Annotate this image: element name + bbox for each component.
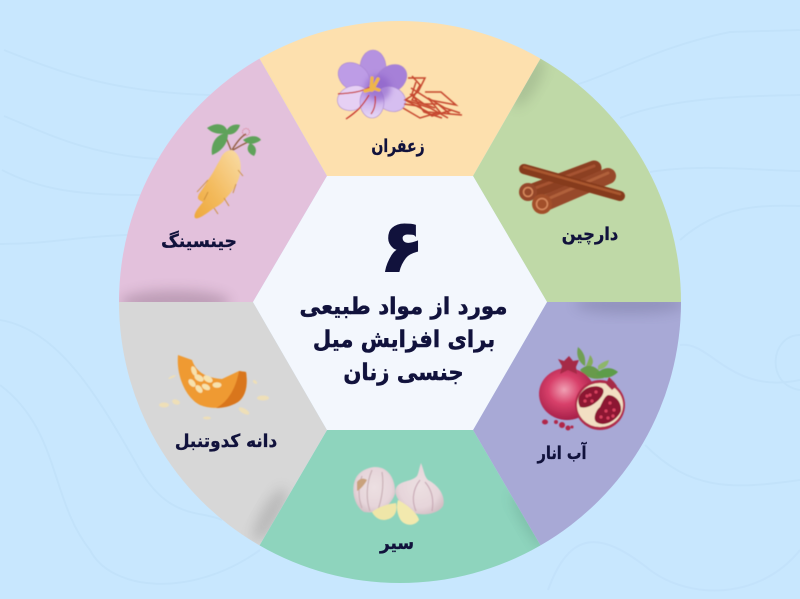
panel: cinnamon	[473, 53, 681, 302]
icon: cinnamon sticks	[519, 166, 620, 214]
panel: saffron	[231, 21, 540, 176]
icon: pumpkin slice	[159, 355, 269, 420]
label: ginseng: جینسینگ	[161, 231, 237, 252]
panel: garlic	[260, 430, 554, 583]
label: pumpkin seeds: دانه کدوتنبل	[175, 432, 277, 452]
wheel	[119, 21, 685, 583]
icon: pomegranate	[539, 347, 625, 430]
panel: pomegranate	[473, 294, 685, 545]
title	[299, 293, 508, 386]
label: saffron: زعفران	[371, 135, 425, 156]
label: cinnamon: دارچین	[562, 224, 618, 245]
label: pomegranate: آب انار	[537, 440, 587, 463]
panel: ginseng	[119, 59, 327, 314]
label: garlic: سیر	[379, 534, 414, 554]
number six: ۶	[380, 204, 424, 288]
icon: ginseng root	[195, 124, 261, 218]
title: مورد از مواد طبیعی	[299, 293, 508, 320]
title: جنسی زنان	[343, 359, 464, 386]
icon: saffron flower	[333, 50, 462, 119]
panel: centre hexagon	[253, 176, 547, 430]
title: برای افزایش میل	[313, 326, 495, 353]
icon: garlic	[353, 463, 444, 525]
panel: pumpkin seeds	[119, 302, 327, 545]
